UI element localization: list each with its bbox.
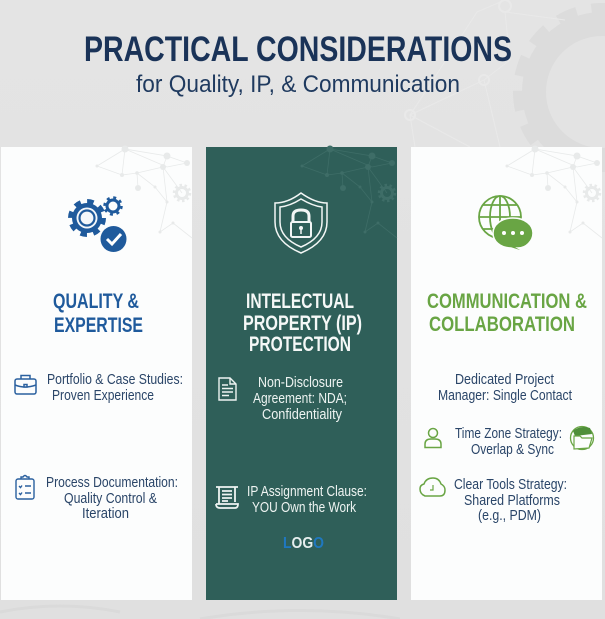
heading: intellectual property protection — [243, 290, 362, 356]
icon: globe with speech bubble — [479, 196, 533, 253]
icon: cloud with clock — [420, 478, 445, 496]
subtitle: for Quality, IP, & Communication — [136, 71, 460, 98]
text: time zone strategy — [455, 426, 562, 458]
text: portfolio: Portfolio & Case Studies: — [47, 372, 183, 388]
icon: document — [219, 378, 236, 400]
title: PRACTICAL CONSIDERATIONS — [84, 30, 512, 69]
heading: quality and expertise — [53, 290, 143, 337]
icon: person — [425, 428, 441, 448]
heading: quality and expertise: EXPERTISE — [54, 314, 143, 337]
text: non-disclosure agreement: Agreement: NDA; — [253, 391, 347, 407]
heading: communication and collaboration — [427, 290, 587, 336]
text: portfolio — [47, 372, 183, 404]
icon: shield with padlock — [275, 193, 327, 253]
icon: gears with check — [70, 198, 126, 252]
text: process documentation: Quality Control & — [64, 491, 157, 507]
text: ip assignment clause: YOU Own the Work — [252, 500, 357, 516]
text: ip assignment clause — [247, 484, 367, 516]
text: clear tools strategy — [454, 477, 567, 524]
panel: communication and collaboration — [411, 146, 602, 600]
text: dedicated project manager: Manager: Single Contact — [438, 388, 572, 404]
text: non-disclosure agreement — [253, 375, 347, 423]
panel: quality and expertise — [1, 146, 192, 600]
text: clear tools strategy: (e.g., PDM) — [478, 508, 541, 524]
text: portfolio: Proven Experience — [52, 388, 154, 404]
text: process documentation: Process Documentation: — [46, 475, 178, 491]
text: dedicated project manager: Dedicated Project — [455, 372, 554, 388]
logo: LOGO — [283, 535, 324, 552]
icon: clipboard — [16, 476, 34, 499]
text: non-disclosure agreement: Confidentiality — [262, 407, 343, 423]
text: process documentation — [46, 475, 178, 522]
text: time zone strategy: Overlap & Sync — [471, 442, 554, 458]
heading: intellectual property protection: PROPERTY (IP) — [243, 312, 362, 335]
text: process documentation: Iteration — [82, 506, 129, 522]
panel: intellectual property protection — [206, 146, 397, 600]
heading: quality and expertise: QUALITY & — [53, 290, 139, 313]
text: non-disclosure agreement: Non-Disclosure — [258, 375, 343, 391]
icon: scroll — [216, 487, 238, 508]
icon: briefcase — [15, 376, 36, 394]
text: ip assignment clause: IP Assignment Clause: — [247, 484, 367, 500]
text: dedicated project manager — [438, 372, 572, 404]
text: time zone strategy: Time Zone Strategy: — [455, 426, 562, 442]
text: clear tools strategy: Shared Platforms — [464, 493, 560, 509]
text: clear tools strategy: Clear Tools Strategy: — [454, 477, 567, 493]
heading: intellectual property protection: INTELECTUAL — [246, 290, 354, 313]
icon: globe with folder — [570, 426, 594, 450]
heading: intellectual property protection: PROTECTION — [249, 333, 351, 356]
